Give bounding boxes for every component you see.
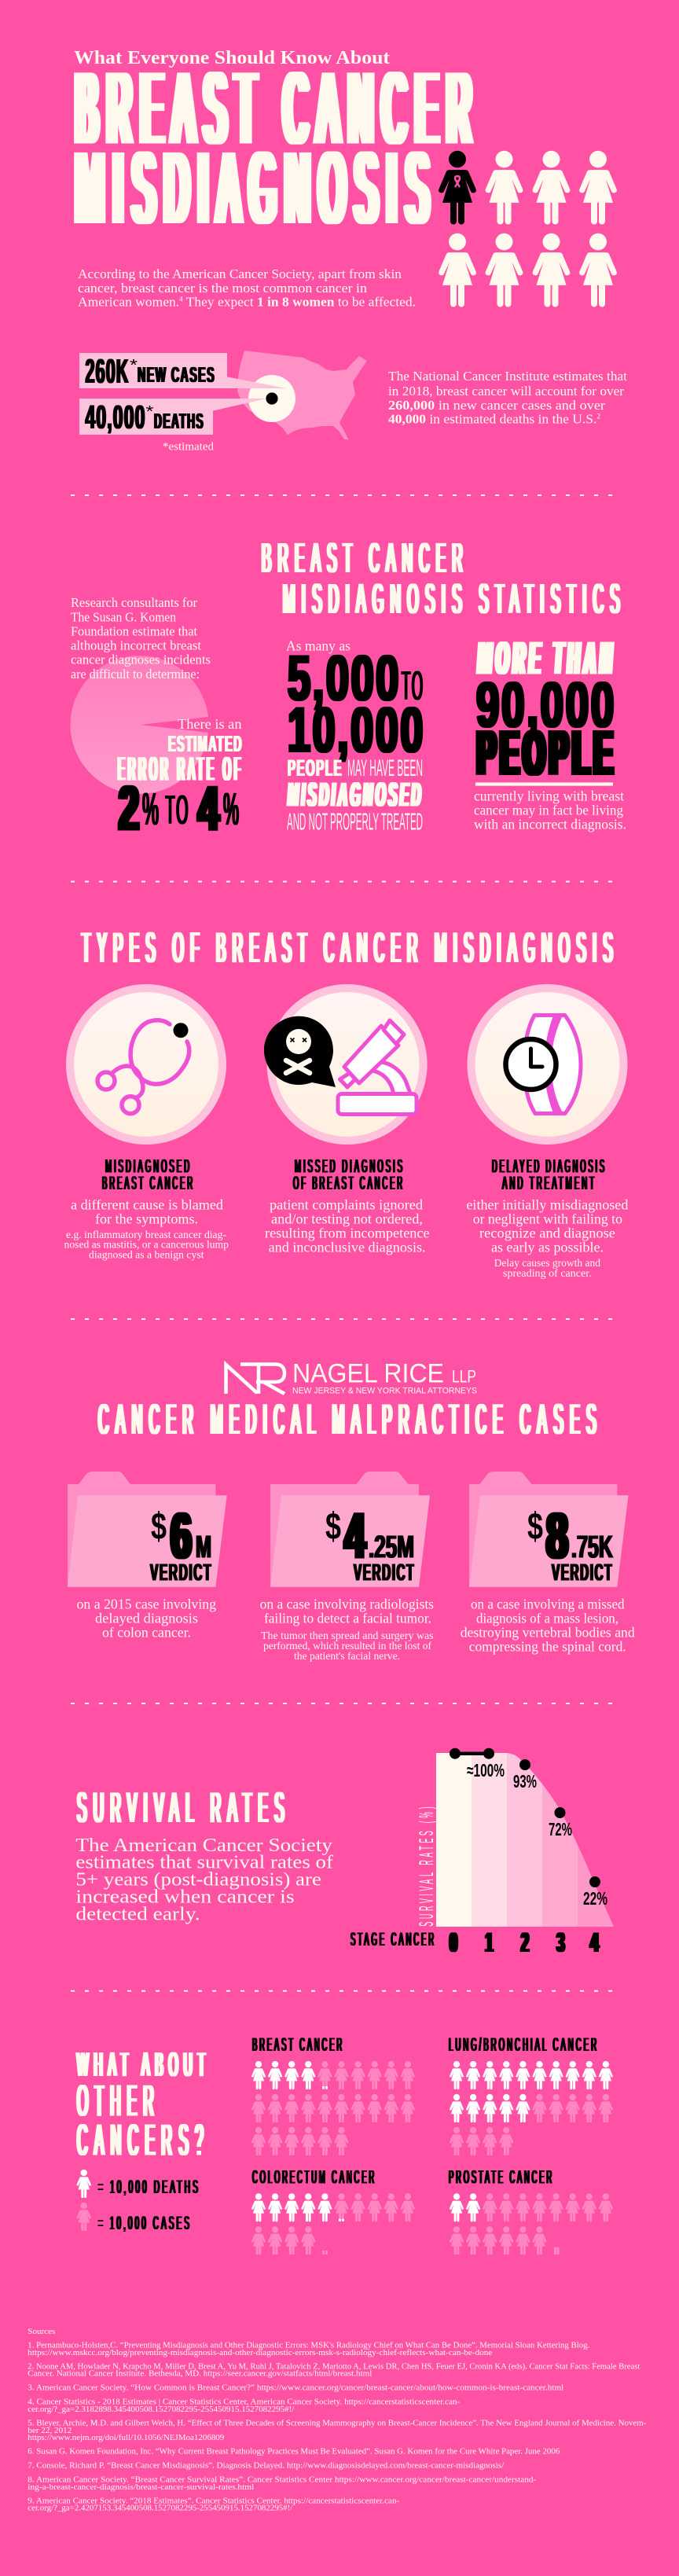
- panel: $4.25M verdict: VERDICT: [354, 1559, 415, 1586]
- stat: 5,000 to 10,000 people: PEOPLE: [288, 755, 343, 781]
- description: diagnosed as a benign cyst: [89, 1250, 204, 1262]
- description: Delay causes growth and: [494, 1258, 600, 1270]
- text: research consultants: although incorrect breast: [71, 638, 201, 653]
- other cancers section: = 10,000 DEATHS: [98, 2177, 200, 2198]
- text: research consultants: cancer diagnoses incidents: [71, 652, 211, 667]
- callout: deaths: [79, 399, 266, 436]
- icon group: 1 in 8 women: [439, 151, 617, 307]
- description: e.g. inflammatory breast cancer diag-: [66, 1229, 226, 1241]
- stat: 5,000 to 10,000 people: As many as: [286, 638, 351, 654]
- description: recognize and diagnose: [479, 1226, 615, 1241]
- caption: compressing the spinal cord.: [469, 1639, 626, 1655]
- National Cancer Institute text: [388, 369, 627, 427]
- panel: misdiagnosed breast cancer: BREAST CANCER: [102, 1173, 195, 1194]
- National Cancer Institute text: in 2018, breast cancer will account for over: [388, 384, 624, 399]
- statistics section: AND NOT PROPERLY TREATED: [287, 808, 423, 836]
- dotted divider: [71, 1703, 613, 1704]
- amount: 8: [546, 1501, 568, 1572]
- dotted divider: [71, 880, 613, 882]
- caption: diagnosis of a mass lesion,: [476, 1611, 618, 1626]
- paragraph: estimates that survival rates of: [75, 1853, 333, 1873]
- callout: new cases: *: [130, 357, 138, 374]
- statistics section: ERROR RATE OF: [118, 751, 244, 788]
- amount: [325, 1501, 415, 1586]
- caption: [461, 1597, 635, 1655]
- statistics section: MAY HAVE BEEN: [347, 755, 423, 781]
- title: [492, 1156, 607, 1194]
- other cancers section: CANCERS?: [77, 2115, 210, 2166]
- callout: deaths: *: [146, 403, 154, 421]
- panel: $4.25M verdict: [260, 1472, 434, 1663]
- amount: $: [527, 1506, 543, 1548]
- panel: $8.75K verdict: [461, 1472, 635, 1655]
- description: [466, 1196, 628, 1280]
- x axis stage numbers: 0: [450, 1927, 457, 1958]
- panel: missed diagnosis: [264, 984, 430, 1255]
- amount: 6: [171, 1501, 192, 1572]
- callout: new cases: [79, 352, 286, 391]
- heading: breast cancer misdiagnosis statistics: [262, 535, 626, 623]
- pie chart: error rate: [71, 656, 208, 794]
- data labels: 22%: [583, 1888, 607, 1909]
- description: resulting from incompetence: [265, 1226, 430, 1241]
- stat: error rate 2% to 4%: %: [142, 784, 159, 835]
- heading: what about other cancers: OTHER: [77, 2076, 160, 2126]
- description: [265, 1196, 430, 1255]
- caption: The tumor then spread and surgery was: [261, 1630, 434, 1642]
- sources: https://www.nejm.org/doi/full/10.1056/NEJMoa1206809: [28, 2434, 224, 2442]
- sources: Sources: [28, 2328, 55, 2336]
- x axis stage numbers: 1: [486, 1927, 494, 1958]
- text: research consultants: [71, 595, 211, 682]
- firm suffix: LLP: [452, 1366, 476, 1386]
- caption: delayed diagnosis: [95, 1611, 198, 1626]
- stat: 5,000 to 10,000 people: 10,000: [288, 695, 425, 766]
- chart: survival rate by stage: [351, 1748, 614, 1958]
- amount: [527, 1501, 613, 1586]
- stat: error rate 2% to 4%: TO: [165, 788, 190, 833]
- caption: on a 2015 case involving: [77, 1597, 216, 1612]
- panel: $8.75K verdict: VERDICT: [552, 1559, 613, 1586]
- amount: VERDICT: [150, 1559, 212, 1586]
- statistics section: MISDIAGNOSED: [288, 776, 424, 814]
- stat: more than 90,000 people: [474, 633, 626, 832]
- caption: on a case involving a missed: [471, 1597, 625, 1612]
- title: [102, 1156, 195, 1194]
- icon: women row 1: [486, 151, 617, 225]
- sources: 5. Bleyer, Archie, M.D. and Gilbert Welch, H. “Effect of Three Decades of Screening Mammography on Breast-Cancer Incidence”. The New England Journal of Medicine. Novem-: [28, 2420, 647, 2428]
- stat: error rate 2% to 4%: 2: [119, 774, 139, 843]
- amount: 4: [344, 1501, 366, 1572]
- icon: skull speech bubble: [264, 1016, 336, 1087]
- icon: folder: [270, 1472, 430, 1587]
- text: OF BREAST CANCER: [293, 1173, 405, 1194]
- description: and inconclusive diagnosis.: [269, 1240, 426, 1255]
- stat: error rate 2% to 4%: %: [223, 784, 239, 835]
- other cancers section: = 10,000 CASES: [98, 2213, 192, 2234]
- paragraph: increased when cancer is: [75, 1887, 295, 1908]
- panel: breast cancer: BREAST CANCER: [252, 2034, 344, 2056]
- sources: 2. Noone AM, Howlader N, Krapcho M, Miller D, Brest A, Yu M, Ruhl J, Tatalovich Z, Mariotto A, Lewis DR, Chen HS, Feuer EJ, Cronin KA (eds). Cancer Stat Facts: Female Breast: [28, 2363, 640, 2372]
- text: MISSED DIAGNOSIS: [295, 1156, 405, 1178]
- description: either initially misdiagnosed: [466, 1196, 628, 1212]
- statistics section: [71, 535, 626, 843]
- footnote: estimated: *estimated: [163, 440, 214, 453]
- logo: Nagel Rice LLP: [226, 1358, 477, 1396]
- title: [293, 1156, 405, 1194]
- description: or negligent with failing to: [473, 1211, 622, 1227]
- amount: $: [151, 1506, 167, 1548]
- description: nosed as mastitis, or a cancerous lump: [64, 1240, 229, 1251]
- sources: ing-a-breast-cancer-diagnosis/breast-cancer-survival-rates.html: [28, 2483, 254, 2492]
- chart area bands: [436, 1753, 614, 1927]
- marker: black dot on map: [266, 392, 278, 405]
- description: and/or testing not ordered,: [271, 1211, 423, 1227]
- panel: prostate cancer: [449, 2167, 613, 2254]
- intro text: 4: [179, 296, 183, 303]
- data labels: 93%: [513, 1771, 537, 1791]
- sources: 3. American Cancer Society. “How Common is Breast Cancer?” https://www.cancer.org/cancer/breast-cancer/about/how-common-is-breast-cancer.html: [28, 2384, 563, 2393]
- icon: stethoscope: [97, 1020, 189, 1114]
- caption: [260, 1597, 434, 1663]
- data labels: 72%: [549, 1819, 572, 1839]
- amount: .75K: [571, 1529, 613, 1565]
- amount: $: [325, 1506, 341, 1548]
- stat: error rate 2% to 4%: There is an: [178, 716, 242, 732]
- icon disc: [66, 984, 226, 1145]
- sources: cer.org/?_ga=2.4207153.345400508.1527082295-255450915.1527082295#!/: [28, 2504, 292, 2513]
- amount: M: [196, 1529, 211, 1565]
- statistics section: TO: [402, 663, 424, 709]
- intro text: [78, 266, 416, 310]
- sources: ber 22, 2012: [28, 2427, 72, 2435]
- National Cancer Institute text: 260,000 in new cancer cases and over: [388, 398, 605, 413]
- sources: 8. American Cancer Society. “Breast Cancer Survival Rates”. Cancer Statistics Center https://www.cancer.org/cancer/breast-cancer/understand-: [28, 2476, 537, 2485]
- paragraph: The American Cancer Society: [75, 1836, 332, 1856]
- heading: what about other cancers: [77, 2045, 211, 2166]
- chart: survival rate by stage: SURVIVAL RATES (%): [416, 1804, 438, 1927]
- marker: white disc on map: [248, 375, 295, 422]
- caption: the patient's facial nerve.: [294, 1651, 400, 1663]
- logo mark NR: [226, 1365, 284, 1394]
- stat: more than 90,000 people: currently living with breast: [474, 788, 624, 803]
- stat: error rate 2% to 4%: [118, 716, 244, 843]
- text: research consultants: The Susan G. Komen: [71, 610, 176, 624]
- dotted divider: [71, 1990, 613, 1992]
- description: for the symptoms.: [95, 1211, 198, 1227]
- firm name: NAGEL RICE: [292, 1358, 444, 1388]
- panel: misdiagnosed breast cancer: [64, 984, 229, 1262]
- other cancers section: WHAT ABOUT: [77, 2045, 211, 2084]
- paragraph: [75, 1836, 333, 1925]
- sources: 7. Console, Richard P. “Breast Cancer Misdiagnosis”. Diagnosis Delayed. http://www.diagnosisdelayed.com/breast-cancer-misdiagnosis/: [28, 2462, 504, 2471]
- intro text: American women.: [78, 294, 177, 310]
- dotted divider: [71, 1318, 613, 1320]
- other cancers section: [77, 2034, 613, 2254]
- x axis stage numbers: 3: [556, 1927, 564, 1958]
- icon: microscope: [338, 1020, 417, 1115]
- icon: wrist watch: [506, 1016, 581, 1113]
- panel: misdiagnosed breast cancer: MISDIAGNOSED: [105, 1156, 192, 1178]
- panel: colorectum cancer: [251, 2167, 415, 2254]
- callout: deaths: 40,000: [85, 399, 146, 436]
- sources: 9. American Cancer Society. “2018 Estimates”. Cancer Statistics Center. https://cancerstatisticscenter.can-: [28, 2497, 400, 2505]
- stat: 5,000 to 10,000 people: 5,000: [288, 643, 401, 714]
- amount: .25M: [369, 1529, 414, 1565]
- sources: Cancer. National Cancer Institute. Bethesda, MD. https://seer.cancer.gov/statfacts/html/breast.html: [28, 2370, 372, 2379]
- sources: cer.org/?_ga=2.3182898.345400508.1527082295-255450915.1527082295#!/: [28, 2405, 294, 2414]
- data labels: ≈100%: [467, 1760, 505, 1780]
- intro text: cancer, breast cancer is the most common cancer in: [78, 281, 368, 296]
- description: patient complaints ignored: [270, 1196, 423, 1212]
- caption: [77, 1597, 216, 1641]
- stat: 5,000 to 10,000 people: [286, 638, 425, 836]
- stat: error rate 2% to 4%: 4: [198, 774, 219, 843]
- amount: [150, 1501, 212, 1586]
- National Cancer Institute text: 40,000 in estimated deaths in the U.S.: [388, 412, 593, 427]
- description: a different cause is blamed: [71, 1196, 223, 1212]
- data labels: [467, 1760, 607, 1909]
- map of the United States: [237, 351, 367, 440]
- caption: performed, which resulted in the lost of: [263, 1641, 431, 1652]
- callout: new cases: NEW CASES: [138, 362, 215, 387]
- chart: survival rate by stage: STAGE CANCER: [351, 1929, 436, 1950]
- callout: deaths: DEATHS: [154, 409, 204, 433]
- header section: [74, 48, 481, 245]
- panel: delayed diagnosis: [466, 984, 628, 1280]
- caption: destroying vertebral bodies and: [461, 1625, 635, 1641]
- icon disc: [267, 984, 428, 1145]
- data points: [450, 1748, 600, 1887]
- panel: lung and bronchial cancer: [449, 2034, 613, 2155]
- US statistics graphic: [79, 351, 367, 453]
- National Cancer Institute text: The National Cancer Institute estimates that: [388, 369, 627, 384]
- icon: folder: [68, 1472, 227, 1587]
- description: as early as possible.: [491, 1240, 604, 1255]
- callout: new cases: 260K: [85, 352, 129, 391]
- sources: 6. Susan G. Komen Foundation, Inc. “Why Current Breast Pathology Practices Must Be Evaluated”. Susan G. Komen for the Cure White Paper. June 2006: [28, 2448, 560, 2457]
- panel: breast cancer: [251, 2034, 415, 2155]
- x axis stage numbers: [450, 1927, 599, 1958]
- text: research consultants: are difficult to determine:: [71, 667, 200, 682]
- x axis stage numbers: 4: [590, 1927, 599, 1958]
- National Cancer Institute text: 2: [596, 413, 600, 421]
- paragraph: 5+ years (post-diagnosis) are: [75, 1869, 321, 1890]
- text: research consultants: Foundation estimate that: [71, 623, 197, 638]
- caption: failing to detect a facial tumor.: [264, 1611, 431, 1626]
- icon: affected woman with ribbon: [439, 151, 476, 225]
- caption: of colon cancer.: [102, 1625, 191, 1641]
- sources: [28, 2328, 647, 2513]
- sources: 4. Cancer Statistics - 2018 Estimates | Cancer Statistics Center, American Cancer Society. https://cancerstatisticscenter.can-: [28, 2398, 461, 2407]
- dotted divider: [71, 494, 613, 496]
- panel: colorectum cancer: COLORECTUM CANCER: [252, 2167, 376, 2188]
- kicker heading: What Everyone Should Know About: [74, 48, 390, 68]
- intro text: They expect: [183, 294, 257, 310]
- sources: https://www.mskcc.org/blog/preventing-misdiagnosis-and-other-diagnostic-errors-msk-s-radiology-chief-reflects-what-can-be-done: [28, 2349, 493, 2357]
- stat: more than 90,000 people: cancer may in fact be living: [474, 803, 623, 818]
- caption: on a case involving radiologists: [260, 1597, 434, 1612]
- paragraph: detected early.: [75, 1905, 200, 1925]
- icon disc: [467, 984, 627, 1145]
- icon: women row 2: [439, 233, 617, 307]
- panel: $6M verdict: [68, 1472, 227, 1641]
- sources: 1. Pernambuco-Holsten,C. “Preventing Misdiagnosis and Other Diagnostic Errors: MSK's Radiology Chief on What Can Be Done”. Memorial Sloan Kettering Blog.: [28, 2342, 589, 2350]
- x axis stage numbers: 2: [521, 1927, 529, 1958]
- stat: error rate 2% to 4%: ESTIMATED: [168, 732, 243, 757]
- survival rates section: [75, 1748, 614, 1958]
- stat: more than 90,000 people: with an incorrect diagnosis.: [474, 817, 626, 832]
- description: spreading of cancer.: [503, 1268, 592, 1280]
- text: research consultants: Research consultants for: [71, 595, 197, 610]
- legend: [77, 2170, 200, 2234]
- icon: folder: [469, 1472, 629, 1587]
- intro text: 1 in 8 women to be affected.: [257, 294, 413, 310]
- intro text: According to the American Cancer Society, apart from skin: [78, 266, 402, 281]
- tagline: NEW JERSEY & NEW YORK TRIAL ATTORNEYS: [292, 1387, 477, 1396]
- description: [64, 1196, 229, 1262]
